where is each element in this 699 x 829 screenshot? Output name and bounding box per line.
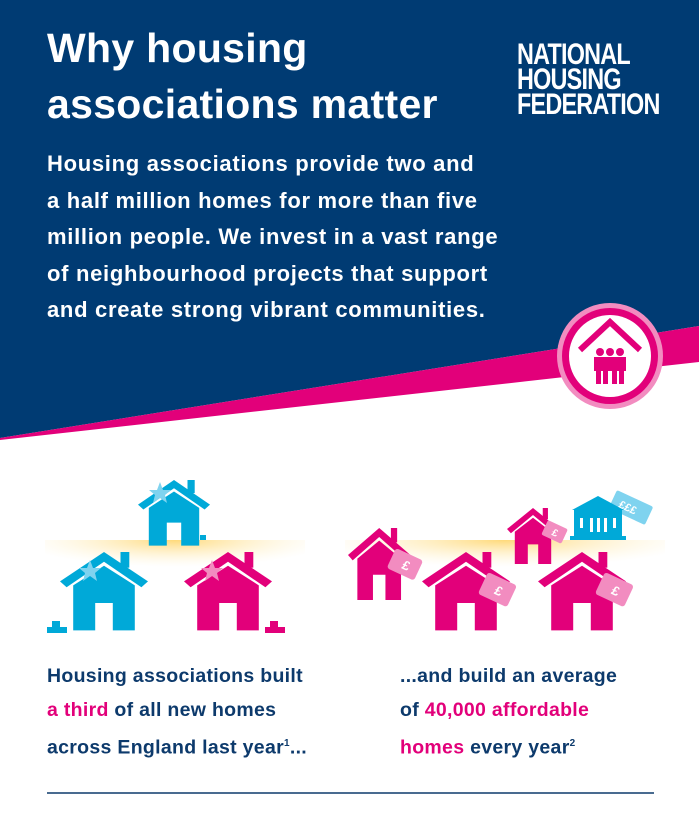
stat left: Housing associations built [47, 665, 303, 687]
title [47, 25, 438, 127]
right group houses [348, 508, 626, 630]
price tags: £ [400, 557, 413, 574]
intro text: a half million homes for more than five [47, 188, 478, 212]
stat left: a third of all new homes [47, 698, 276, 720]
intro text: million people. We invest in a vast range [47, 224, 498, 249]
stat right: homes every year2 [400, 736, 575, 758]
logo: NATIONAL [517, 38, 630, 71]
building [570, 496, 626, 540]
price tags: £££ [617, 499, 638, 517]
title: Why housing [47, 25, 308, 71]
icon: community badge [557, 303, 663, 409]
price tags: £ [492, 582, 506, 599]
logo: HOUSING [517, 63, 621, 96]
price tags: £ [550, 527, 560, 540]
stat right: ...and build an average [400, 665, 617, 687]
intro text: and create strong vibrant communities. [47, 297, 486, 322]
intro text: Housing associations provide two and [47, 151, 474, 176]
intro text: of neighbourhood projects that support [47, 260, 488, 286]
logo: FEDERATION [517, 88, 660, 121]
intro text [47, 151, 498, 322]
stat right: of 40,000 affordable [400, 698, 589, 720]
stat left [47, 665, 307, 758]
title: associations matter [47, 81, 438, 127]
stat right [400, 665, 617, 758]
logo [517, 38, 660, 121]
stat left: across England last year1... [47, 736, 307, 758]
price tags: £ [609, 582, 623, 599]
price tags [387, 490, 653, 607]
illustrations [45, 480, 665, 633]
left group houses [47, 480, 210, 633]
